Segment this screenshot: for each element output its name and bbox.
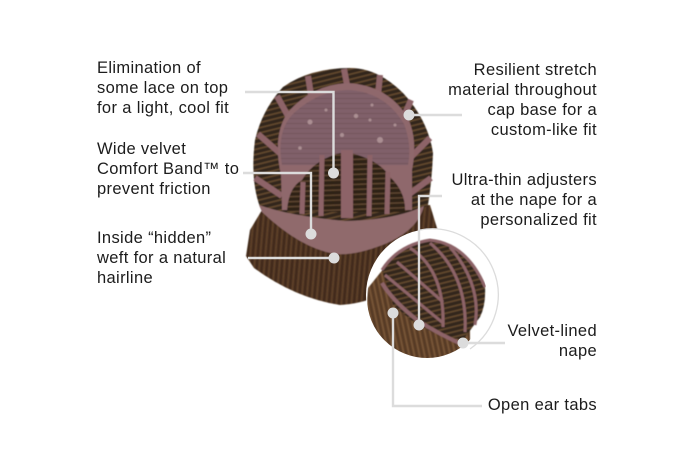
callout line: hidden weft xyxy=(248,252,340,264)
label: stretch material: material throughout xyxy=(448,81,597,99)
label: hidden weft: hairline xyxy=(97,269,153,287)
label: adjusters: personalized fit xyxy=(480,211,597,229)
label: lace: for a light, cool fit xyxy=(97,99,229,117)
hair below cap xyxy=(246,205,440,305)
callout line: stretch material xyxy=(404,110,462,120)
label: stretch material: custom-like fit xyxy=(491,121,597,139)
window straps xyxy=(302,155,388,216)
label: lace: Elimination of xyxy=(97,59,201,77)
inset detail photo xyxy=(365,240,485,362)
ring outline xyxy=(420,229,498,349)
label: stretch material: cap base for a xyxy=(488,101,597,119)
label: adjusters: Ultra-thin adjusters xyxy=(452,171,597,189)
cap back with wefts xyxy=(253,68,433,250)
label: comfort band: Wide velvet xyxy=(97,140,186,158)
label: comfort band: prevent friction xyxy=(97,180,211,198)
label: hidden weft: Inside “hidden” xyxy=(97,229,211,247)
callout line: lace elimination xyxy=(245,92,339,178)
label: comfort band xyxy=(97,140,239,198)
inset circle ring xyxy=(366,229,498,361)
label: hidden weft xyxy=(96,229,226,287)
lace pin holes xyxy=(298,104,396,150)
main wig photo xyxy=(246,68,440,305)
label: stretch material xyxy=(448,61,597,139)
comfort band xyxy=(259,205,424,254)
label: velvet nape xyxy=(507,322,597,360)
label: velvet nape: nape xyxy=(559,342,597,360)
label: adjusters: at the nape for a xyxy=(471,191,597,209)
lower open window xyxy=(287,152,405,212)
label: hidden weft: weft for a natural xyxy=(96,249,226,267)
label: adjusters xyxy=(452,171,597,229)
outer cap straps xyxy=(255,69,431,196)
label: lace xyxy=(97,59,229,117)
lace crown panel xyxy=(278,83,414,210)
callout line: comfort band xyxy=(243,173,316,240)
label: velvet nape: Velvet-lined xyxy=(507,322,597,340)
callout line: adjusters xyxy=(414,196,442,330)
callout line: velvet nape xyxy=(458,338,505,348)
label: stretch material: Resilient stretch xyxy=(474,61,597,79)
label: ear tabs: Open ear tabs xyxy=(488,396,597,414)
label: lace: some lace on top xyxy=(97,79,228,97)
callout line: ear tabs xyxy=(388,308,482,406)
label: comfort band: Comfort Band™ to xyxy=(97,160,239,178)
